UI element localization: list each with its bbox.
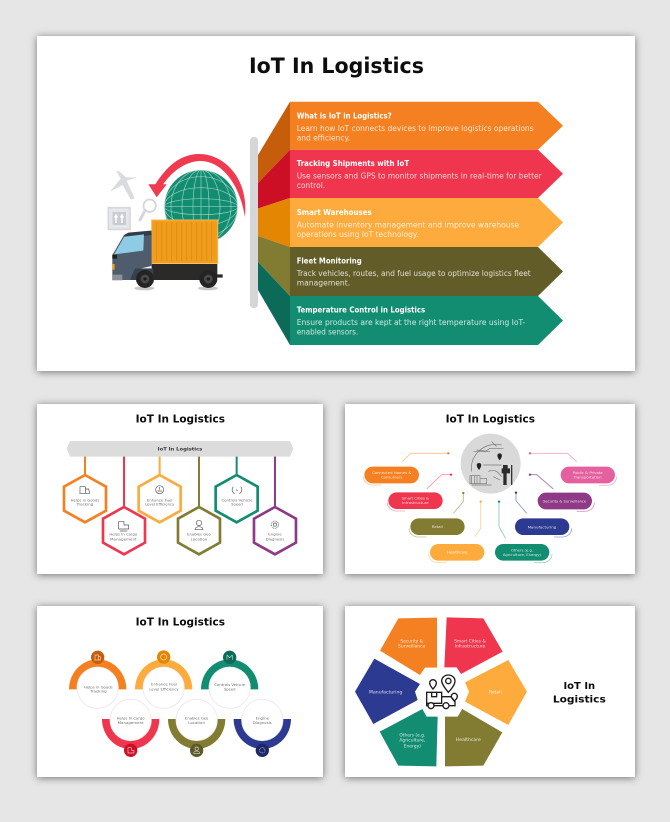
chevron: Tracking Shipments: control.: [297, 181, 325, 190]
segment: Healthcare: Healthcare: [456, 737, 481, 743]
ring: cargo management: Helps In Cargo: [117, 715, 145, 720]
banner: [67, 441, 293, 457]
hexagon: goods tracking: Tracking: [76, 502, 94, 507]
segment: Security: Surveillance: [398, 644, 426, 650]
icon: truck: [112, 220, 223, 290]
connector lines: [85, 455, 275, 507]
chevron: Smart Warehouses: Automate inventory management and improve warehouse: [297, 220, 519, 229]
chevron: Fleet Monitoring: [258, 236, 563, 296]
ring: geo location: Location: [188, 720, 206, 725]
pill: Smart Cities: [387, 473, 452, 511]
chevron: What is IoT in Logistics: Learn how IoT connects devices to improve logistics operations: [297, 124, 534, 133]
segment: Healthcare: [445, 709, 502, 766]
chevron: Tracking Shipments: Use sensors and GPS to monitor shipments in real-time for better: [297, 172, 542, 180]
chevron: Smart Warehouses: [258, 198, 563, 247]
hexagon: vehicle speed: Speed: [231, 502, 243, 507]
hexagon: goods tracking: [64, 475, 106, 522]
chevron: Tracking Shipments: [258, 150, 563, 208]
ring: cargo management: Management: [118, 720, 144, 725]
pill: Healthcare: Healthcare: [447, 550, 468, 555]
chevron: Tracking Shipments: Tracking Shipments with IoT: [297, 159, 410, 168]
icon: globe: [164, 170, 238, 243]
pill: Smart Cities: Smart Cities &: [402, 496, 429, 501]
segment: Manufacturing: [355, 659, 420, 724]
chevron: Fleet Monitoring: management.: [297, 278, 350, 288]
hexagon: fuel efficiency: Enhance Fuel: [147, 497, 172, 502]
panel: hexagon wheel: [345, 606, 635, 777]
panel: main slide: [37, 36, 635, 371]
pill: Others: Others (e.g.: [511, 547, 533, 552]
chevron: Fleet Monitoring: Track vehicles, routes, and fuel usage to optimize logistics fleet: [296, 269, 531, 278]
pill: Security: Security & Surveillance: [543, 498, 587, 503]
panel: applications pills: [345, 404, 635, 574]
chevron: What is IoT in Logistics: and efficiency.: [297, 134, 350, 143]
hexagon: cargo management: Helps In Cargo: [109, 532, 138, 537]
segment: Security: Security &: [400, 638, 423, 644]
segment: Smart Cities: Smart Cities &: [454, 638, 486, 644]
central illustration: [461, 434, 521, 494]
pill: Others: [495, 500, 552, 563]
side title: [553, 681, 606, 705]
ring: vehicle speed: Controls Vehicle: [214, 682, 246, 687]
chevron: Temperature Control: Temperature Control in Logistics: [297, 306, 426, 315]
ring: goods tracking: Tracking: [89, 689, 107, 694]
ring: cargo management: [102, 699, 159, 757]
hexagon: vehicle speed: [216, 475, 258, 522]
chevron: Temperature Control: enabled sensors.: [297, 328, 358, 336]
hexagon: engine diagnosis: Diagnosis: [266, 536, 284, 541]
ring: fuel efficiency: [135, 650, 192, 708]
ring: goods tracking: [69, 651, 126, 708]
arrow: curved red: [148, 154, 245, 217]
vertical gray bar: [250, 137, 258, 308]
chevron: Temperature Control: [258, 262, 563, 345]
segment: Others: [380, 709, 438, 766]
segment: Others: Agriculture,: [399, 738, 425, 744]
side title: IoT In: [563, 681, 595, 692]
pill: Manufacturing: [515, 491, 572, 537]
ring: goods tracking: Helps in Goods: [84, 684, 113, 689]
ring: engine diagnosis: Engine: [256, 715, 270, 720]
ring: fuel efficiency: Enhance Fuel: [151, 682, 177, 687]
segment: Others: Others (e.g.: [399, 732, 425, 738]
pill: Security: [529, 473, 594, 511]
segment: Others: Energy): [404, 743, 421, 749]
chevron: What is IoT in Logistics: [258, 102, 563, 183]
hexagon: geo location: [178, 507, 220, 554]
main title: IoT In Logistics: [249, 54, 424, 79]
hexagon panel title: IoT In Logistics: [136, 413, 225, 425]
hexagon: engine diagnosis: Engine: [268, 532, 282, 537]
segment: Security: [380, 618, 437, 675]
pill: Smart Cities: Infrastructure: [402, 500, 429, 505]
segment: Retail: Retail: [489, 690, 502, 696]
side title: Logistics: [553, 694, 606, 705]
rings panel title: IoT In Logistics: [136, 617, 225, 629]
panel: hexagons: [37, 404, 323, 574]
pill: Connected Homes: Consumers: [381, 475, 402, 480]
hexagon: cargo management: Management: [110, 536, 137, 541]
icon: package box: [108, 208, 130, 229]
segment: Smart Cities: [444, 617, 503, 674]
hexagon: fuel efficiency: [139, 475, 181, 522]
pill: Public transportation: [529, 452, 617, 485]
ring: engine diagnosis: [234, 699, 291, 757]
icon: magnifier: [140, 200, 156, 220]
hexagon: geo location: Enables Geo: [187, 532, 211, 537]
hexagon: fuel efficiency: Level Efficiency: [145, 502, 175, 507]
chevron: Smart Warehouses: Smart Warehouses: [297, 208, 372, 217]
pill: Retail: [409, 492, 465, 537]
pill: Retail: Retail: [432, 524, 443, 529]
icon: airplane: [110, 171, 137, 199]
ring: geo location: Enables Geo: [185, 715, 209, 720]
hexagon: goods tracking: Helps in Goods: [71, 497, 99, 502]
pill: Manufacturing: Manufacturing: [528, 524, 557, 529]
ring: engine diagnosis: Diagnosis: [253, 720, 272, 725]
segment: Retail: [465, 660, 527, 725]
hexagon: vehicle speed: Controls Vehicle: [221, 497, 253, 502]
banner: IoT In Logistics: [158, 447, 203, 453]
pill: Healthcare: [429, 500, 484, 563]
chevron: What is IoT in Logistics: What is IoT in Logistics?: [297, 112, 392, 121]
hexagon: engine diagnosis: [254, 507, 296, 554]
pill: Connected Homes: Connected Homes &: [372, 470, 411, 475]
ring: vehicle speed: Speed: [224, 687, 236, 692]
pill: Public transportation: Transportation: [573, 475, 602, 480]
panel: semicircle rings: [37, 606, 323, 777]
icon: logistics truck with pins: [427, 675, 457, 709]
pill: Others: Agriculture, Energy): [503, 552, 542, 557]
ring: fuel efficiency: Level Efficiency: [149, 686, 179, 691]
pills panel title: IoT In Logistics: [446, 413, 535, 425]
segment: Smart Cities: Infrastructure: [455, 644, 486, 650]
chevron: Smart Warehouses: operations using IoT technology.: [297, 230, 419, 239]
segment: Manufacturing: Manufacturing: [369, 690, 402, 696]
pill: Connected Homes: [363, 452, 449, 485]
hexagon: geo location: Location: [191, 536, 208, 541]
chevron: Fleet Monitoring: Fleet Monitoring: [297, 257, 362, 266]
chevron: Temperature Control: Ensure products are kept at the right temperature using IoT-: [297, 318, 525, 327]
illustration: truck, globe and arrow: [108, 154, 245, 290]
pill: Public transportation: Public & Private: [573, 470, 603, 475]
ring: vehicle speed: [201, 651, 258, 708]
hexagon: cargo management: [103, 507, 145, 554]
ring: geo location: [168, 699, 225, 757]
